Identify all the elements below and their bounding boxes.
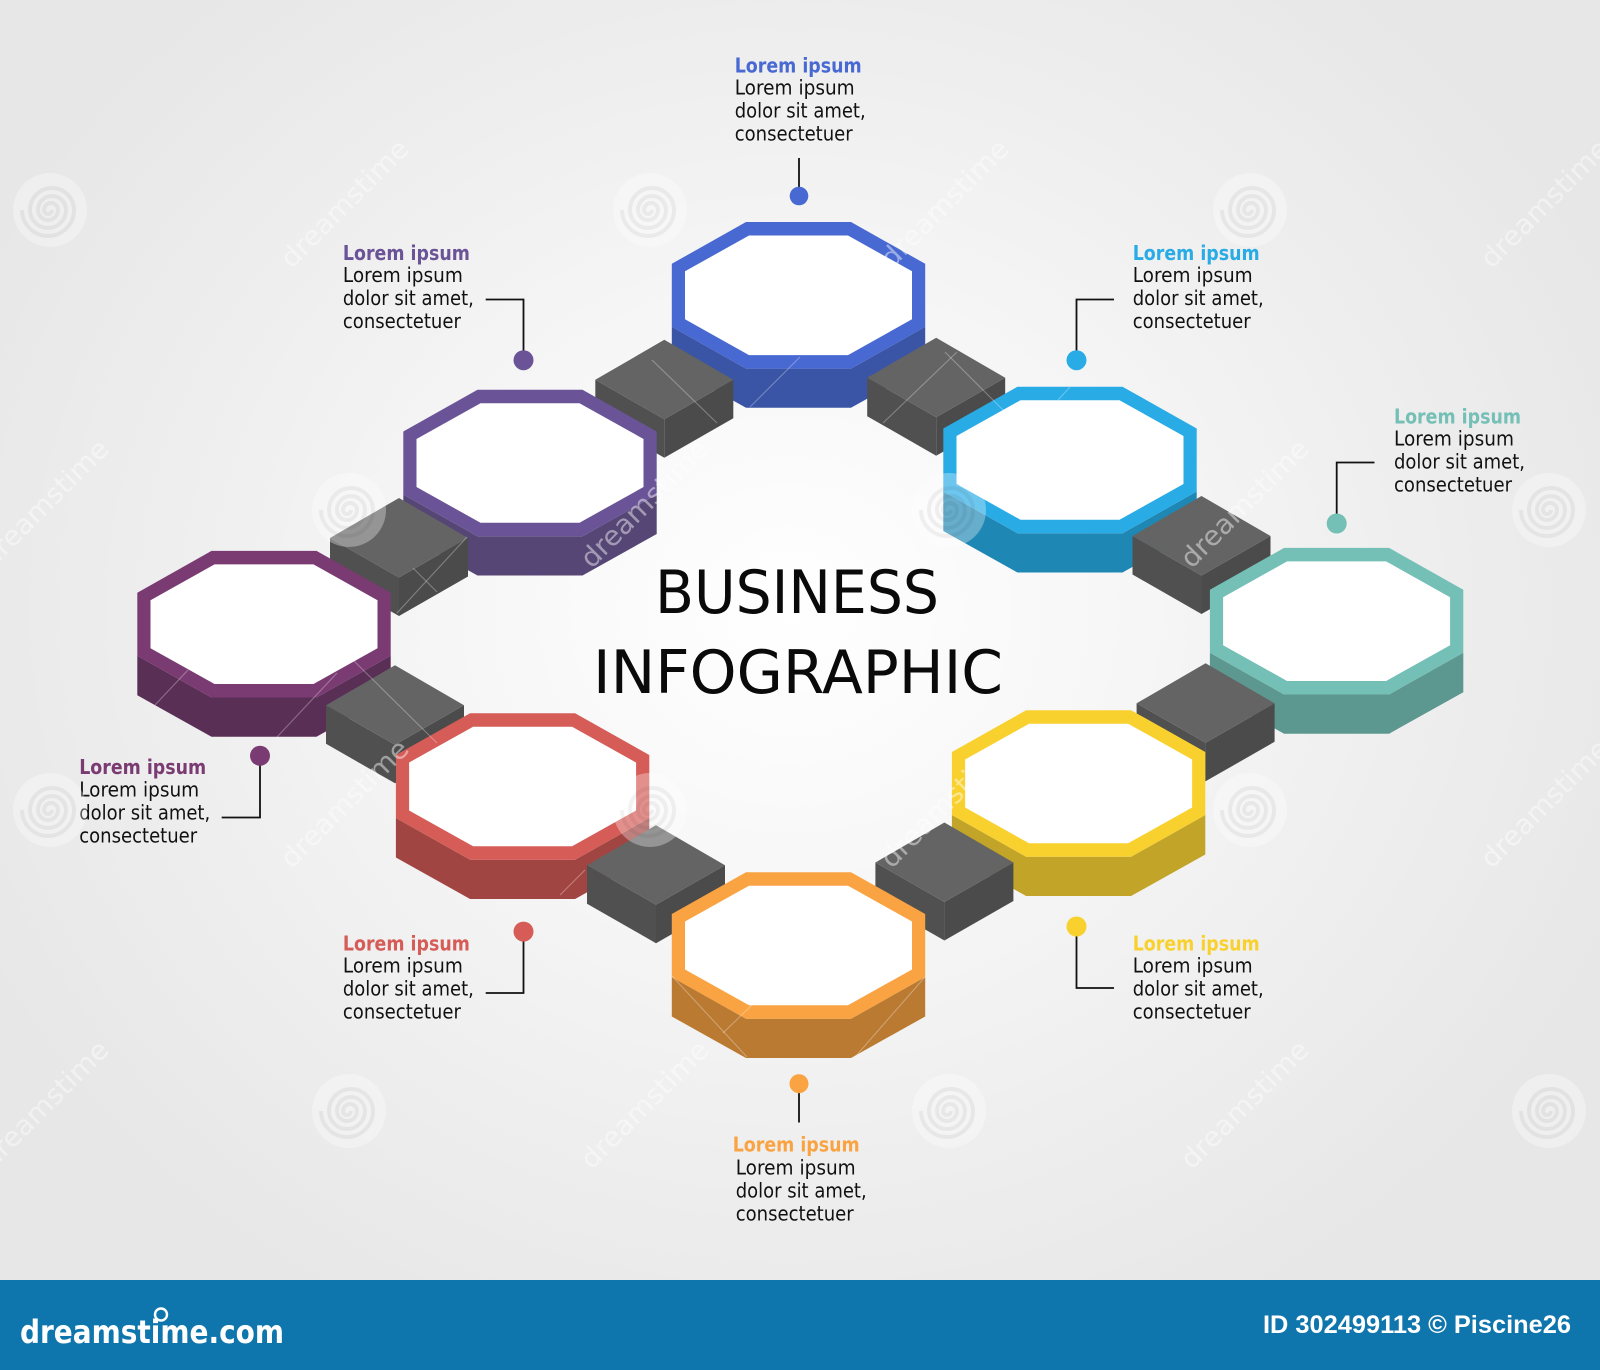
- octagon 5: orange: [672, 872, 925, 1058]
- callout: light blue: dolor sit amet,: [1133, 286, 1264, 310]
- callout: dark purple: Lorem ipsum: [79, 778, 199, 802]
- connector: blue to purple: [595, 340, 733, 458]
- watermark overlay: [0, 134, 1600, 1175]
- leader: yellow: [1066, 916, 1114, 988]
- connector: teal to yellow: [1137, 663, 1275, 781]
- footer credit: ID 302499113 © Piscine26: [1263, 1311, 1571, 1339]
- callout: orange: dolor sit amet,: [736, 1179, 867, 1203]
- callout: orange: consectetuer: [736, 1202, 854, 1226]
- callout: yellow: consectetuer: [1133, 1000, 1251, 1024]
- callout: light blue: [1133, 241, 1264, 333]
- callout: purple: Lorem ipsum: [343, 263, 463, 287]
- callout: blue: dolor sit amet,: [735, 98, 866, 122]
- callout: yellow: [1133, 931, 1264, 1024]
- watermark overlay: dreamstime: [1175, 434, 1315, 574]
- callout: teal: dolor sit amet,: [1394, 450, 1525, 474]
- connector: dark purple to red: [326, 665, 464, 783]
- connector: purple to dark purple: [330, 498, 468, 616]
- callout: teal: Lorem ipsum: [1394, 405, 1521, 429]
- callout: blue: Lorem ipsum: [735, 54, 862, 78]
- callout: light blue: Lorem ipsum: [1133, 241, 1260, 265]
- callout: dark purple: consectetuer: [79, 824, 198, 848]
- octagon 3: teal: [1210, 548, 1463, 734]
- title: BUSINESS: [655, 558, 939, 628]
- octagon 8: purple: [403, 390, 657, 576]
- callout: purple: Lorem ipsum: [343, 241, 470, 265]
- callout: teal: Lorem ipsum: [1394, 426, 1514, 450]
- callout: yellow: Lorem ipsum: [1133, 931, 1260, 955]
- leader: red: [486, 922, 534, 993]
- callout: dark purple: [79, 755, 210, 848]
- watermark overlay: dreamstime: [575, 434, 715, 574]
- callout: red: [343, 931, 474, 1024]
- callout: orange: Lorem ipsum: [733, 1132, 860, 1156]
- title: INFOGRAPHIC: [593, 638, 1003, 708]
- callout: yellow: dolor sit amet,: [1133, 977, 1264, 1001]
- callout: blue: Lorem ipsum: [735, 76, 855, 100]
- callout: red: Lorem ipsum: [343, 931, 470, 955]
- callout: yellow: Lorem ipsum: [1133, 954, 1253, 978]
- callout: red: Lorem ipsum: [343, 954, 463, 978]
- callout: light blue: consectetuer: [1133, 309, 1251, 333]
- callout: blue: consectetuer: [735, 122, 853, 146]
- leader: orange: [790, 1074, 808, 1122]
- octagon 7: dark purple: [137, 551, 391, 737]
- callout: teal: [1394, 405, 1525, 496]
- leader: blue: [790, 158, 808, 205]
- callout: teal: consectetuer: [1394, 472, 1513, 496]
- callout: light blue: Lorem ipsum: [1133, 263, 1253, 287]
- callout: dark purple: dolor sit amet,: [79, 800, 210, 824]
- leader: light blue: [1066, 300, 1114, 370]
- connector: yellow to orange: [875, 822, 1013, 940]
- connector: light blue to teal: [1132, 496, 1270, 614]
- leader: teal: [1327, 462, 1374, 534]
- footer logo: dreamstime.com: [20, 1313, 284, 1351]
- callout: red: dolor sit amet,: [343, 977, 474, 1001]
- callout: purple: consectetuer: [343, 309, 462, 333]
- leader: dark purple: [222, 746, 270, 818]
- callout: purple: [343, 241, 474, 333]
- watermark overlay: dreamstime: [275, 734, 415, 874]
- footer bar: [0, 1280, 1600, 1370]
- octagon 6: red: [396, 713, 649, 899]
- connector: red to orange: [587, 825, 725, 943]
- callout: purple: dolor sit amet,: [343, 286, 474, 310]
- watermark overlay: dreamstime: [575, 1035, 715, 1175]
- callout: orange: Lorem ipsum: [736, 1156, 856, 1180]
- watermark overlay: dreamstime: [875, 134, 1015, 274]
- title: [593, 558, 1003, 708]
- callout: blue: [735, 54, 866, 146]
- callout: orange: [733, 1132, 867, 1226]
- octagon 1: blue: [672, 222, 925, 408]
- watermark overlay: dreamstime: [275, 134, 415, 274]
- callout: dark purple: Lorem ipsum: [79, 755, 206, 779]
- octagon 2: light blue: [943, 387, 1197, 572]
- callout: red: consectetuer: [343, 1000, 462, 1024]
- leader: purple: [486, 300, 534, 370]
- octagon 4: yellow: [952, 710, 1205, 896]
- watermark overlay: dreamstime: [875, 734, 1015, 874]
- watermark overlay: dreamstime: [1175, 1035, 1315, 1175]
- connector: blue to light blue: [867, 338, 1005, 456]
